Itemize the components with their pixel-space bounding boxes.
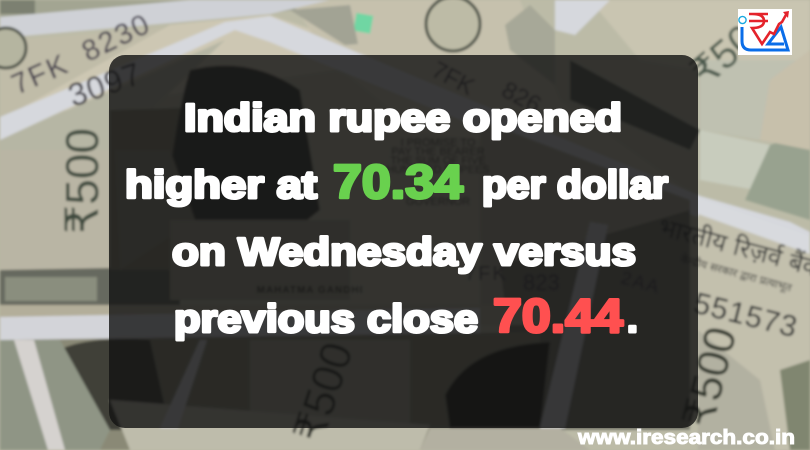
note printing: 823 [523,270,560,295]
headline text [125,97,668,342]
headline text: previous close [174,298,478,341]
background: banknote photo: PAY THE BEARER [391,146,485,158]
background: banknote photo: केन्द्रीय सरकार द्वारा प्रत्याभूत [679,252,794,296]
white strips [0,0,330,38]
background: banknote photo: ₹500 [674,322,746,432]
note printing: 2AA [619,268,663,297]
note printing: 8230 [77,8,156,68]
headline text: . [627,298,638,341]
background: banknote photo: ₹500 [56,128,108,234]
background: banknote photo: I PROMISE TO [401,137,476,149]
note printing [7,8,801,344]
headline text: higher at [125,164,317,207]
website url: www.iresearch.co.in [577,427,795,449]
note printing: 826 [497,76,545,119]
note printing: 7FK [465,263,508,285]
seals [426,0,480,51]
background: banknote photo: ₹500 [285,337,363,448]
background: banknote photo: ₹500 [683,2,781,95]
background: banknote photo: MAHATMA GANDHI [257,285,363,296]
note printing: 7FK [427,56,479,101]
headline text: on Wednesday versus [172,231,636,274]
headline text: 70.44 [493,289,623,342]
background: banknote photo: HUNDRED RUPEES [386,164,490,176]
note printing: 7FK [7,48,74,101]
panel: dark translucent overlay [109,55,698,428]
headline text: per dollar [482,164,668,207]
right note [698,212,810,450]
lower area [0,305,540,325]
background: banknote photo: GOVERNOR [406,196,470,208]
note printing: 551573 [690,287,801,344]
portrait top [170,66,320,250]
note printing: 3097 [64,55,146,114]
headline text: 70.34 [333,155,463,208]
background: banknote photo: THE SUM OF FIVE [390,155,486,167]
dark band [0,268,180,305]
logo [738,9,792,55]
headline text: Indian rupee opened [184,97,622,140]
